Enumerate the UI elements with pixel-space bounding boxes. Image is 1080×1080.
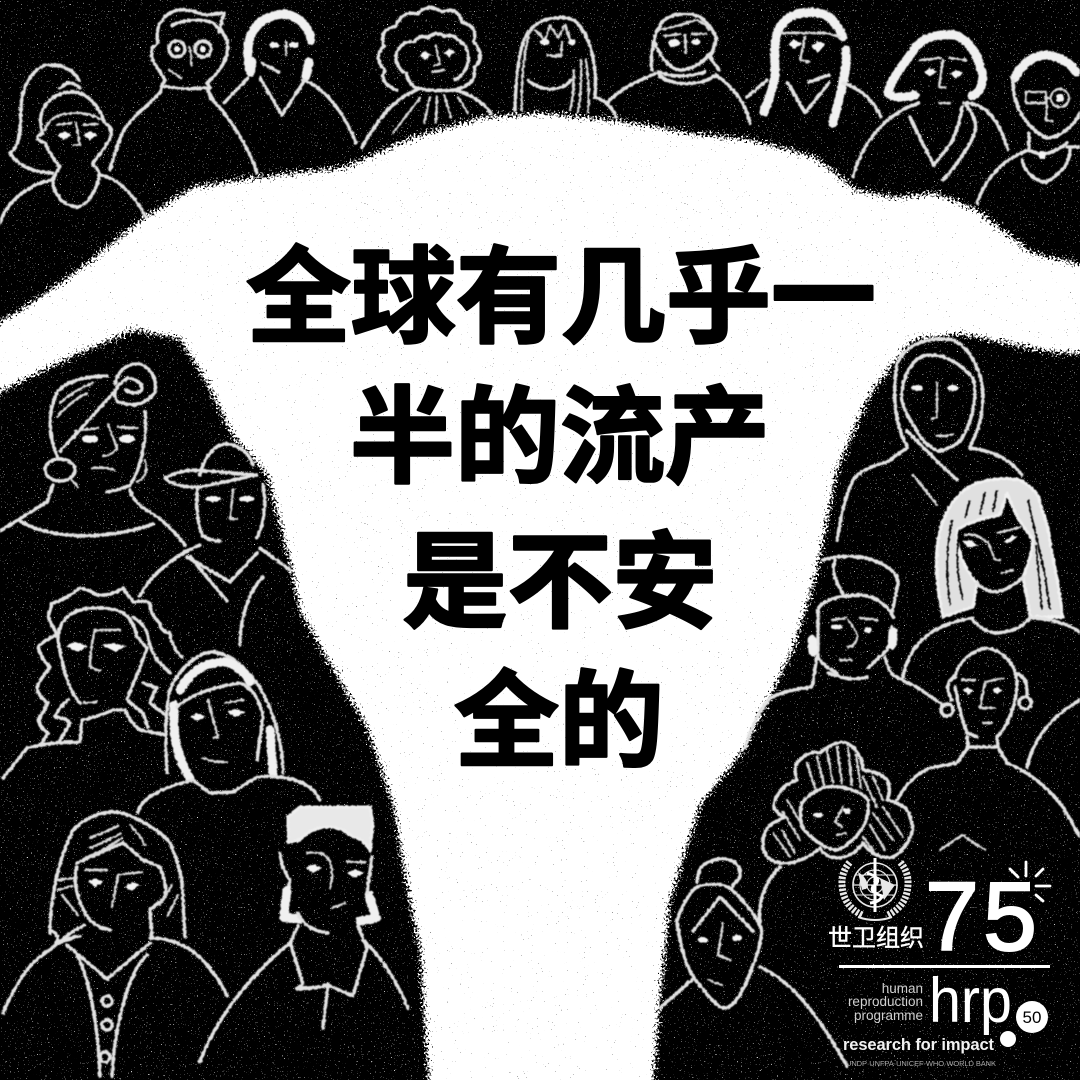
person: glasses man — [110, 10, 257, 173]
person: woman with striped voluminous hair — [760, 742, 912, 926]
person: top row, ponytail woman — [0, 65, 146, 223]
person: woman with wavy hair — [3, 588, 182, 778]
divider line between logos — [839, 965, 1050, 968]
chalk smudge on the lower right figure — [940, 835, 985, 850]
logo: 75th anniversary mark: 75 — [925, 862, 1041, 971]
logo tagline: research for impact — [843, 1036, 994, 1054]
logo: hrp wordmark with 50 badge — [929, 966, 1048, 1047]
person: right group, hooded woman — [837, 339, 1022, 540]
logo: HRP name: programme — [854, 1008, 923, 1023]
title — [246, 240, 876, 781]
person: curly-haired woman — [362, 7, 491, 147]
person: long-haired woman with V-neck — [224, 14, 356, 143]
person: woman with curly white hair in wrap robe — [853, 35, 1008, 180]
person: woman with long light hair — [903, 479, 1080, 677]
person: woman with long braids — [515, 18, 616, 117]
title: 半的流产 — [350, 380, 770, 497]
person: man with glasses and short white hair — [977, 55, 1080, 203]
person: woman with round hat — [745, 556, 943, 748]
title: 全的 — [454, 664, 664, 781]
logo text: WHO name: 世卫组织 — [828, 925, 924, 952]
logo: HRP name — [848, 981, 923, 1023]
title: 是不安 — [402, 525, 718, 642]
person: older woman with hair bun — [660, 859, 847, 1066]
person: woman with straight light hair — [138, 652, 320, 812]
logo: HRP name: human — [882, 981, 923, 996]
person: man with flat white hair and collared shirt — [200, 807, 408, 1062]
title: 全球有几乎一 — [246, 240, 876, 357]
person: bald woman with earrings — [897, 648, 1080, 837]
logo: WHO emblem — [842, 858, 908, 920]
person: woman with long white hair — [747, 12, 881, 123]
person: woman with parted hair and cardigan — [3, 812, 227, 1076]
person: man with baseball cap — [140, 444, 290, 645]
logo: hrp wordmark with 50 badge: 50 — [1023, 1008, 1041, 1027]
person: left group, woman with turban and earring — [0, 364, 185, 545]
logo: HRP name: reproduction — [848, 994, 923, 1009]
logo sponsors: UNDP·UNFPA·UNICEF·WHO·WORLD BANK — [846, 1059, 996, 1068]
logo: hrp wordmark with 50 badge: hrp — [929, 966, 1012, 1036]
person: woman with headscarf and collar — [607, 14, 750, 123]
